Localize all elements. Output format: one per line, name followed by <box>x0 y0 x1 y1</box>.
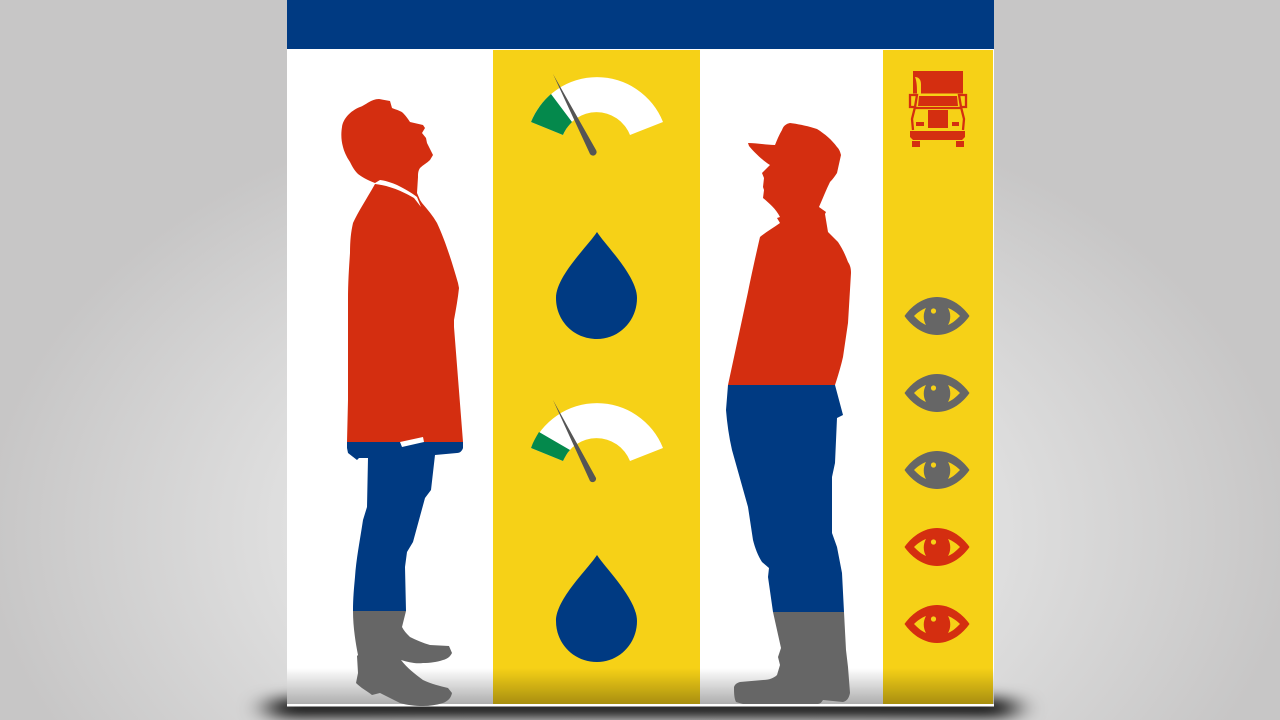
truck cab sides and mirrors <box>910 95 966 130</box>
truck grille <box>928 110 948 128</box>
pocket square <box>400 437 424 447</box>
gauge needle <box>553 400 596 482</box>
bottom shading <box>287 668 994 704</box>
truck headlights <box>916 122 959 126</box>
header bar <box>287 0 994 49</box>
panel: yellow column right <box>883 50 993 704</box>
gauge needle <box>553 74 597 156</box>
panel: white base <box>287 49 994 706</box>
boots <box>353 611 452 706</box>
figure: man in suit <box>341 99 463 706</box>
icon: water drop bottom <box>556 555 637 662</box>
truck wheels <box>912 141 964 147</box>
trousers <box>347 442 463 611</box>
truck bumper <box>910 131 965 140</box>
icon: eye grey 1 <box>904 297 970 335</box>
jacket and head <box>341 99 463 442</box>
boot <box>734 612 850 704</box>
panel: poster <box>287 0 994 706</box>
gauge green zone <box>531 432 570 461</box>
panel: yellow column middle <box>493 50 700 704</box>
icon: eye grey 3 <box>904 451 970 489</box>
gauge: bottom <box>531 400 663 482</box>
icon: water drop top <box>556 232 637 339</box>
trousers <box>726 385 844 612</box>
gauge: top <box>531 74 663 156</box>
icon: truck <box>910 71 966 147</box>
floor shadow <box>268 698 1016 718</box>
truck windshield <box>918 96 958 106</box>
icon: eye grey 2 <box>904 374 970 412</box>
gauge arc <box>531 77 663 135</box>
icon: eye red 2 <box>904 605 970 643</box>
figure: man with cap <box>726 123 851 704</box>
gauge arc <box>531 403 663 461</box>
gauge green zone <box>531 94 572 135</box>
jacket, head and cap <box>728 123 851 385</box>
truck box <box>913 71 963 94</box>
collar <box>375 180 421 207</box>
icon: eye red 1 <box>904 528 970 566</box>
